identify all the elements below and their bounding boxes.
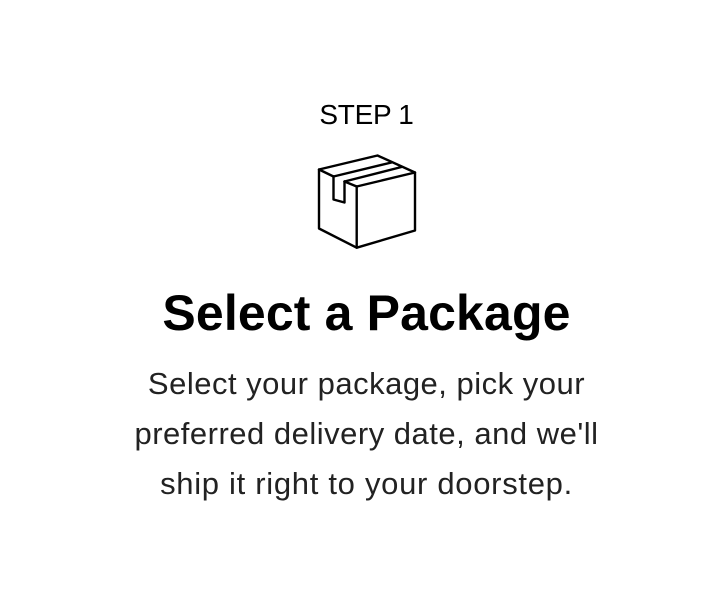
step label: STEP 1 [319, 99, 414, 130]
description text: preferred delivery date, and we'll [134, 416, 599, 451]
description text: Select your package, pick your [148, 366, 585, 401]
title: Select a Package [162, 285, 571, 341]
description text: ship it right to your doorstep. [160, 466, 573, 501]
description text [134, 366, 599, 501]
